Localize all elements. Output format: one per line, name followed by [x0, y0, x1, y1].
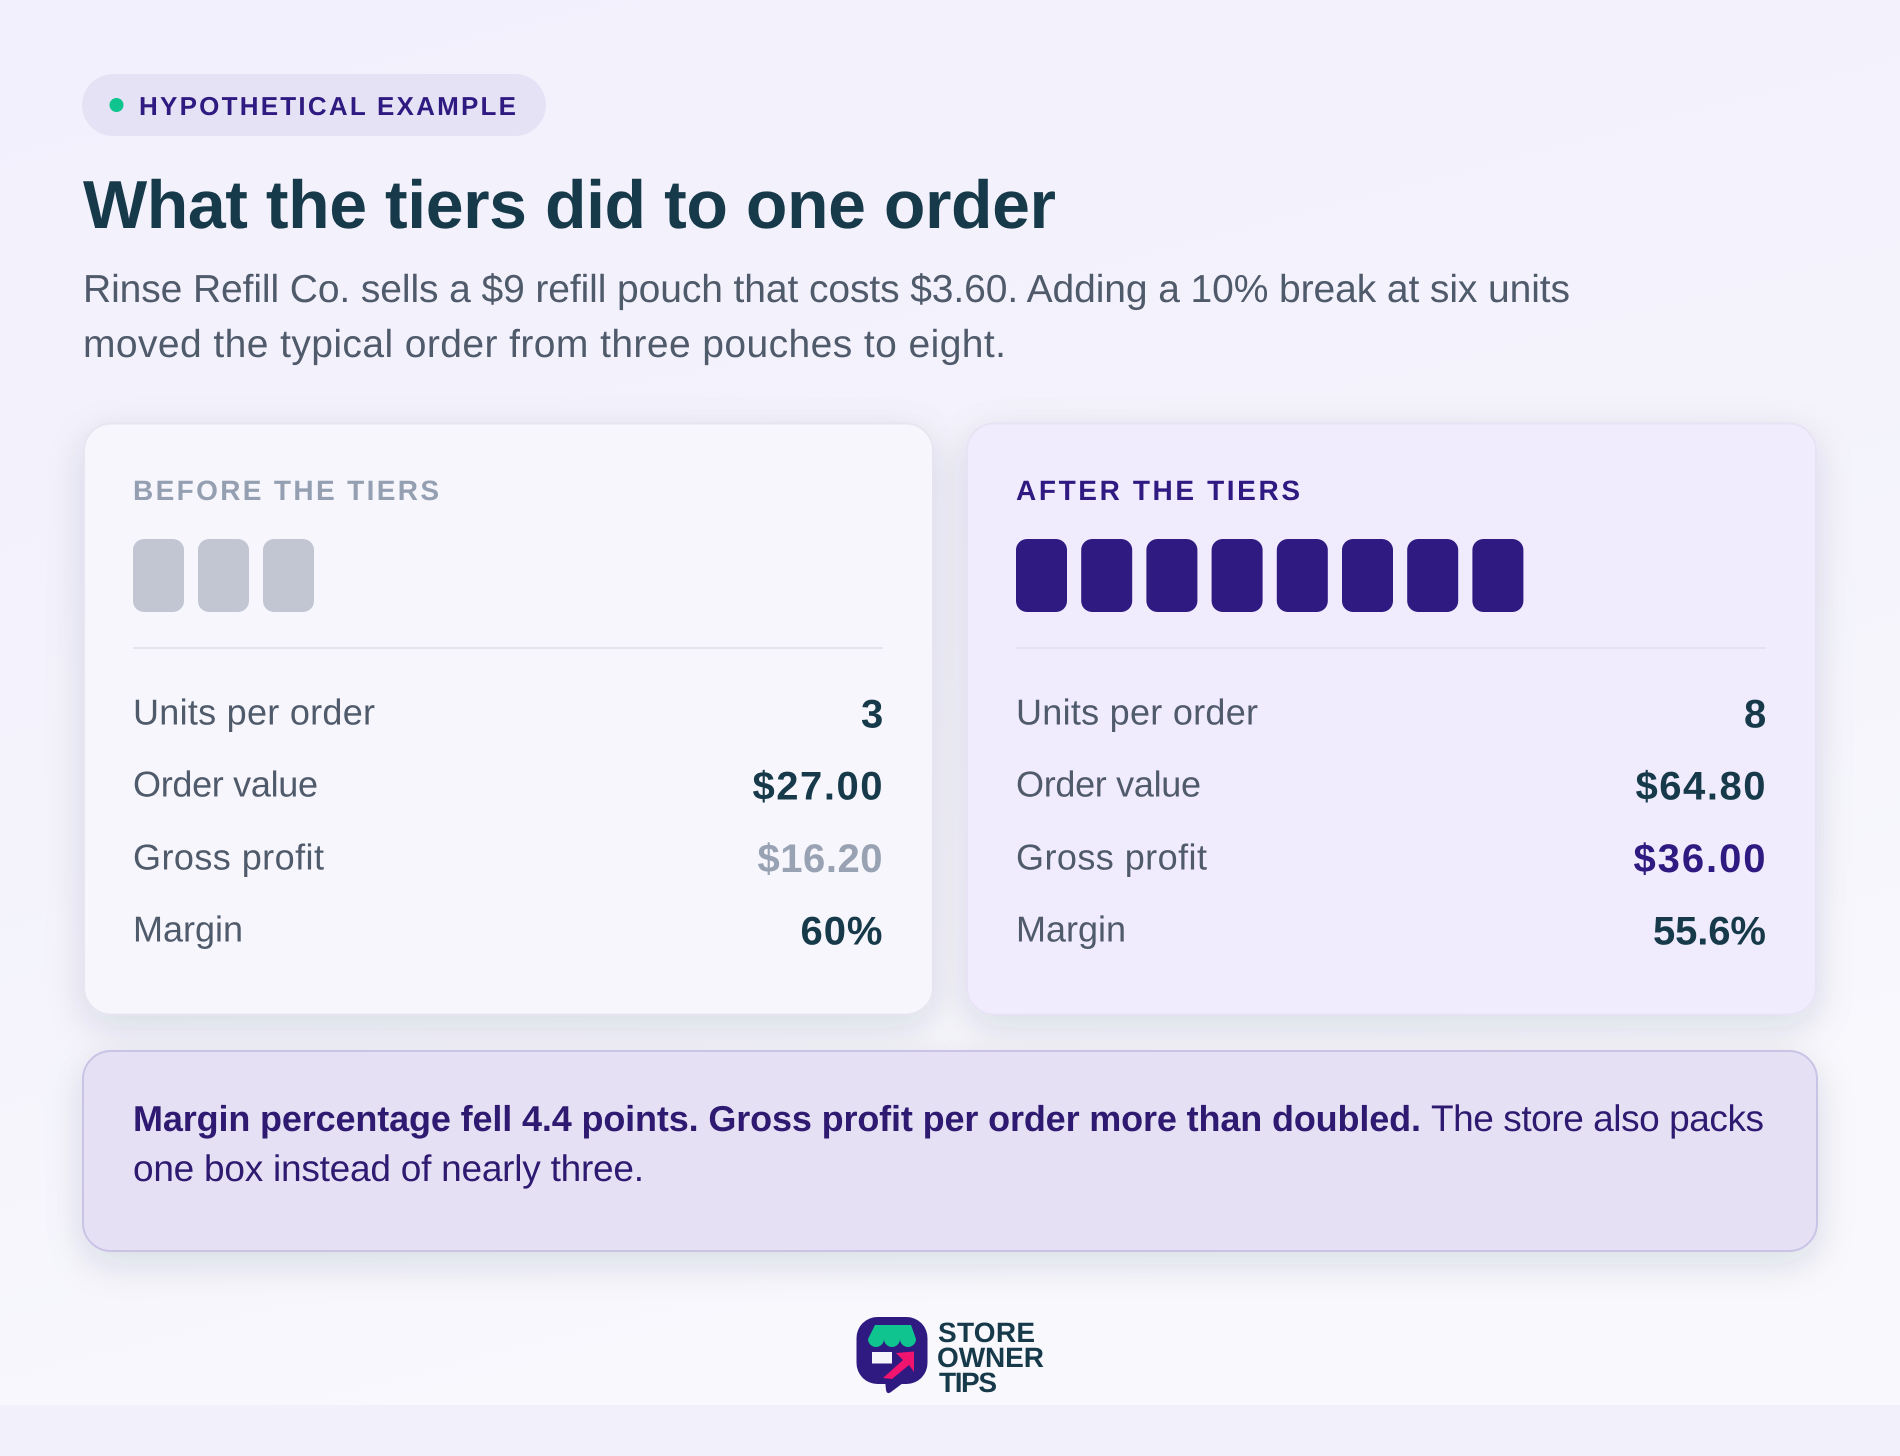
- row: order value: [1016, 764, 1766, 808]
- row: margin: Margin: [1016, 908, 1126, 950]
- row: gross profit: [133, 836, 882, 881]
- panel: before the tiers: [84, 424, 933, 1014]
- row: order value: [133, 764, 882, 808]
- wordmark: OWNER: [937, 1342, 1044, 1373]
- row: units per order: 3: [861, 692, 883, 736]
- callout: takeaway: one box instead of nearly three.: [133, 1148, 644, 1189]
- row: order value: Order value: [133, 764, 318, 804]
- row: gross profit: Gross profit: [1016, 836, 1207, 878]
- icon: shop speech bubble: [856, 1317, 928, 1393]
- row: gross profit: $16.20: [758, 837, 882, 881]
- row: margin: [1016, 908, 1766, 954]
- unit blocks: 3 pouches: [133, 539, 314, 612]
- row: units per order: 8: [1744, 692, 1766, 736]
- subtitle: [83, 268, 1570, 366]
- badge: hypothetical example: [82, 74, 546, 136]
- callout: takeaway: [83, 1051, 1817, 1251]
- subtitle: moved the typical order from three pouches to eight.: [83, 323, 1006, 366]
- heading: after the tiers: AFTER THE TIERS: [1016, 475, 1300, 506]
- heading: before the tiers: BEFORE THE TIERS: [133, 475, 439, 506]
- logo: store owner tips: [856, 1317, 1044, 1398]
- row: units per order: Units per order: [133, 692, 375, 732]
- row: margin: [133, 908, 882, 954]
- callout: takeaway: Margin percentage fell 4.4 points. Gross profit per order more than doubled.: [133, 1098, 1421, 1139]
- row: order value: $64.80: [1636, 764, 1766, 808]
- row: units per order: [1016, 692, 1766, 736]
- row: order value: $27.00: [752, 764, 882, 808]
- row: units per order: [133, 692, 883, 736]
- wordmark: [937, 1317, 1044, 1398]
- row: gross profit: Gross profit: [133, 836, 324, 878]
- row: margin: Margin: [133, 908, 243, 950]
- subtitle: Rinse Refill Co. sells a $9 refill pouch that costs $3.60. Adding a 10% break at six units: [83, 268, 1570, 311]
- row: order value: Order value: [1016, 764, 1201, 804]
- wordmark: TIPS: [939, 1367, 997, 1398]
- row: gross profit: $36.00: [1634, 837, 1766, 881]
- wordmark: STORE: [938, 1317, 1035, 1348]
- row: gross profit: [1016, 836, 1766, 881]
- row: margin: 55.6%: [1653, 910, 1766, 954]
- row: units per order: Units per order: [1016, 692, 1258, 732]
- unit blocks: 8 pouches: [1016, 539, 1523, 612]
- row: margin: 60%: [800, 910, 882, 954]
- badge: hypothetical example: HYPOTHETICAL EXAMPLE: [139, 91, 516, 121]
- callout: takeaway: The store also packs: [1431, 1098, 1764, 1139]
- panel: after the tiers: [967, 424, 1816, 1014]
- title: What the tiers did to one order: [83, 167, 1056, 243]
